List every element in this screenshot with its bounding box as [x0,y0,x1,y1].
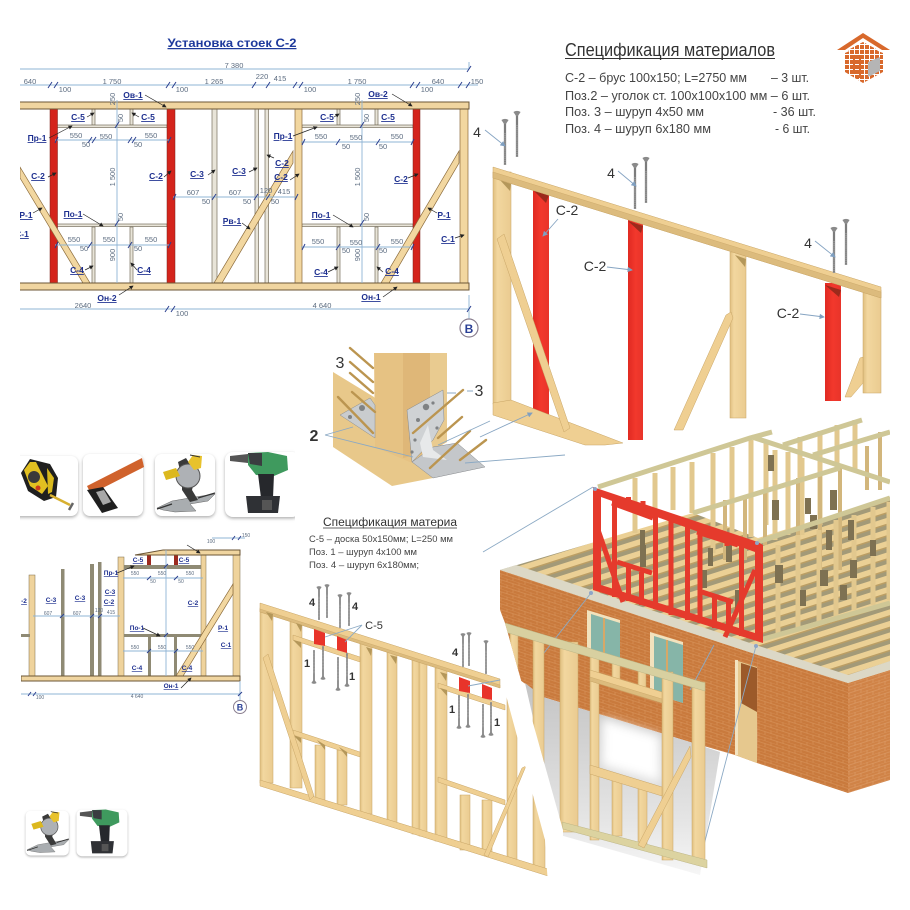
dimension numbers: 2640 [75,301,91,310]
detail leader lines [325,391,565,463]
element labels: Пр-1 [28,133,47,143]
element labels: По-1 [64,209,83,219]
element labels: С-4 [182,665,193,672]
dimension numbers: 50 [116,213,125,221]
dimension numbers: 1 500 [108,168,117,186]
callout numbers 4: 4 [473,124,481,140]
dimension numbers: 550 [131,571,139,577]
dimension numbers: 550 [186,645,194,651]
specification lines [309,534,453,571]
dimension numbers: 120 [95,608,103,614]
detail labels [310,355,484,445]
red stud 3 [825,283,841,401]
dimension numbers: 640 [432,77,444,86]
dimension numbers: 415 [278,187,290,196]
diagonal brace left [497,234,570,432]
brick wall center [757,655,848,793]
specification lines: С-5 – доска 50х150мм; L=250 мм [309,534,453,545]
dimension numbers: 550 [391,237,403,246]
dimension numbers: 50 [82,140,90,149]
element labels: С-5 [133,557,144,564]
element labels: Р-1 [437,210,451,220]
window headers and short studs [21,565,201,676]
brace shadows [266,612,447,757]
dimension numbers: 150 [471,77,483,86]
dimension numbers: 250 [108,93,117,105]
dimension numbers: 50 [379,142,387,151]
dimension ticks [48,66,471,312]
element labels: Он-1 [164,683,179,690]
callout numbers: 1 [304,658,310,670]
axis marker B: В [465,322,474,336]
floor bracket plate [412,443,485,478]
panel: specification for С-5 [309,517,458,571]
specification lines: Поз. 4 – шуруп 6х180мм; [309,560,419,571]
dimension numbers: 607 [187,188,199,197]
floor deck with joists [500,497,890,683]
side studs [295,108,468,283]
specification lines: - 6 шт. [775,122,810,136]
element labels: С-4 [137,265,151,275]
element labels: С-2 [188,600,199,607]
element labels: Ов-1 [123,90,143,100]
top plate [505,623,705,691]
callout numbers: 4 [309,597,316,609]
gray shadow backdrop [525,683,720,875]
dimension numbers: 50 [379,246,387,255]
top plate [260,603,500,688]
dimension lines [20,62,478,320]
dimension numbers: 550 [70,131,82,140]
callout numbers 4 [473,124,812,251]
element labels: С-3 [105,589,116,596]
dimension numbers: 250 [353,93,362,105]
red stud 1 [533,188,549,418]
element labels: С-1 [221,642,232,649]
element labels: С-5 [320,112,334,122]
dimension numbers: 1 265 [205,77,223,86]
dimension numbers: 607 [73,611,81,617]
dimension numbers: 550 [350,133,362,142]
thin gray studs [57,109,413,283]
studs [29,555,240,676]
icon: miter saw small [26,811,69,856]
dimension numbers: 50 [243,197,251,206]
dimension numbers: 50 [134,244,142,253]
brick wall left [500,570,758,763]
dimension numbers: 1 750 [103,77,121,86]
callout numbers: 1 [349,671,355,683]
dimension numbers: 4 640 [131,694,143,700]
dimension numbers: 50 [342,142,350,151]
element labels: С-1 [441,234,455,244]
dimension numbers: 550 [315,132,327,141]
bracket rib [420,425,447,460]
connector line to house frame [483,487,593,552]
element labels: С-3 [232,166,246,176]
brick wall right [848,670,890,793]
detail labels: 3 [336,355,345,372]
callout leader lines [480,130,835,437]
element labels: С-3 [75,595,86,602]
callout numbers: 4 [352,601,359,613]
element labels: Р-1 [218,625,228,632]
panel: material specification [565,40,816,136]
diagonal brace right [484,766,526,857]
projection lines [540,593,756,860]
dimension numbers: 550 [391,132,403,141]
red blocks С-5 [314,629,492,700]
left bracket plate [340,398,375,438]
dimension numbers: 550 [145,131,157,140]
top plate [493,167,881,298]
element labels: С-4 [314,267,328,277]
icon: carpenter square [83,454,144,516]
dimension numbers: 1 500 [353,168,362,186]
specification lines: Поз.2 – уголок ст. 100х100х100 мм – 6 шт. [565,89,810,103]
dimension numbers: 550 [312,237,324,246]
dimension numbers: 550 [158,571,166,577]
dimension numbers: 100 [207,539,215,545]
element labels [21,557,232,690]
post [374,353,447,463]
diagonal brace [176,584,233,676]
element labels: Ов-2 [368,89,388,99]
front frame [505,623,707,868]
element labels: Он-2 [97,293,117,303]
concrete ledge [500,565,890,683]
dimension numbers: 550 [131,645,139,651]
dimension numbers: 640 [24,77,36,86]
detail labels: 3 [475,383,484,400]
dimension numbers: 7 380 [225,61,243,70]
dimension numbers [36,533,250,701]
diagonal brace left [263,654,314,800]
leader arrows [33,94,464,297]
specification lines [565,71,816,136]
screws [311,584,494,738]
callout numbers [304,597,500,729]
specification lines: - 36 шт. [773,105,816,119]
element labels: С-5 [71,112,85,122]
full-height studs [260,608,545,870]
dimension numbers: 900 [108,249,117,261]
dimension numbers: 50 [362,114,371,122]
panel: corner bracket detail [310,348,565,486]
dimension numbers: 4 640 [313,301,331,310]
diagonal brace center [674,312,733,430]
short studs [612,661,647,844]
callout numbers: 1 [494,717,500,729]
top and bottom plates [21,550,240,681]
dimension numbers: 550 [145,235,157,244]
dimension numbers: 415 [274,74,286,83]
element labels: -2 [21,598,27,605]
element labels: С-1 [15,229,29,239]
specification lines: – 3 шт. [771,71,809,85]
dimension numbers: 50 [342,246,350,255]
dimension numbers: 550 [350,238,362,247]
red studs С-2 [50,109,420,283]
element labels: С-5 [141,112,155,122]
dimension numbers: 50 [150,579,156,585]
specification lines: Поз. 3 – шуруп 4х50 мм [565,105,704,119]
panel: house with highlighted frame [500,420,890,875]
element labels: С-2 [394,174,408,184]
element labels: С-3 [190,169,204,179]
dimension numbers: 50 [362,213,371,221]
dimension numbers: 550 [68,235,80,244]
dimension numbers: 50 [116,114,125,122]
element labels: С-4 [385,266,399,276]
diagonal brace right [845,357,863,397]
specification lines: Поз. 1 – шуруп 4х100 мм [309,547,417,558]
dimension numbers: 900 [353,249,362,261]
element labels: Пр-1 [104,570,119,577]
callout labels С-2: С-2 [584,258,606,274]
icon: miter saw [155,454,215,516]
bottom plate [562,822,707,868]
element labels: С-2 [104,599,115,606]
base board [333,372,433,486]
dimension numbers: 50 [271,197,279,206]
detail labels: 2 [310,428,319,445]
axis marker B [234,700,246,714]
element labels: Рв-1 [223,216,241,226]
callout numbers: 1 [449,704,455,716]
element labels: Он-1 [361,292,381,302]
element labels: С-4 [70,265,84,275]
panel: tools row [10,452,300,517]
dimension numbers: 550 [186,571,194,577]
dimension numbers: 50 [202,197,210,206]
panel: 3D wall frame with С-5 blocks [260,584,548,876]
element labels [15,89,455,303]
element labels: С-2 [149,171,163,181]
screws pos. 4 [501,111,850,273]
dimension numbers: 50 [80,244,88,253]
dimension numbers: 1 750 [348,77,366,86]
dimension lines [21,538,245,700]
element labels: С-2 [31,171,45,181]
dimension numbers: 100 [304,85,316,94]
bracket holes [348,401,439,454]
panel: second plan drawing [21,533,250,714]
windows [587,610,683,703]
middle and right studs [730,252,881,418]
red stud 2 [628,218,643,440]
dimension numbers: 50 [178,579,184,585]
dimension numbers: 550 [158,645,166,651]
bottom plate [260,780,548,876]
panel: top plan drawing [15,61,483,337]
specification lines: С-2 – брус 100х150; L=2750 мм [565,71,747,85]
element labels: Пр-1 [274,131,293,141]
red highlighted frame [593,487,763,643]
element labels: Р-1 [19,210,33,220]
element labels: По-1 [130,625,145,632]
dimension numbers [24,61,483,318]
callout labels С-2: С-2 [777,305,799,321]
icon: cordless drill [225,452,300,517]
callout numbers 4: 4 [804,235,812,251]
bottom plate [493,400,623,445]
element labels: С-5 [381,112,395,122]
headers and sills [590,670,662,796]
dimension numbers: 100 [176,85,188,94]
heading: Спецификация материа [323,517,458,529]
door [735,660,757,763]
element labels: С-4 [132,665,143,672]
specification heading: Спецификация материалов [565,40,775,60]
headers and sills [293,635,505,805]
dimension numbers: 100 [176,309,188,318]
stud top shadows [533,190,841,297]
leader arrows [117,545,200,688]
callout С-5: С-5 [365,620,383,632]
panel: tools bottom [26,809,128,856]
dimension numbers: 100 [421,85,433,94]
screws pos. 3 [338,348,486,468]
dimension numbers: 550 [100,132,112,141]
dimension numbers: 415 [107,610,115,616]
front studs [510,628,705,860]
icon: brick house logo [837,33,890,83]
title: Установка стоек С-2: Установка стоек С-2 [168,36,297,50]
diagonal brace [638,746,691,848]
red blocks С-5 [147,555,178,565]
top and bottom plates [18,102,469,290]
panel: 3D wall frame with red studs [473,111,881,445]
frame corner markers [589,487,759,648]
callout numbers 4: 4 [607,165,615,181]
specification lines: Поз. 4 – шуруп 6х180 мм [565,122,711,136]
back wall top plates and studs [598,420,890,640]
dimension numbers: 50 [134,140,142,149]
callout labels С-2 [556,202,799,321]
left stud [493,172,511,404]
dimension numbers: 100 [36,695,44,701]
dimension numbers: 100 [59,85,71,94]
callout numbers: 4 [452,647,459,659]
icon: cordless drill small [76,809,128,856]
dimension numbers: 607 [44,611,52,617]
callout labels С-2: С-2 [556,202,578,218]
white window opening [602,718,660,782]
right vertical bracket plate [407,390,444,462]
element labels: По-1 [312,210,331,220]
dimension numbers: 550 [103,235,115,244]
short studs [315,745,492,855]
element labels: С-2 [274,172,288,182]
dimension numbers: 120 [260,186,272,195]
dimension numbers: 220 [256,72,268,81]
diagonal braces [20,151,459,283]
dimension numbers: 150 [242,533,250,539]
axis marker B: В [237,702,244,712]
element labels: С-2 [275,158,289,168]
element labels: С-3 [46,597,57,604]
dimension ticks [28,536,242,696]
element labels: С-5 [179,557,190,564]
axis marker B [460,319,478,337]
icon: tape measure [10,456,78,516]
leader lines [325,625,500,686]
dimension numbers: 607 [229,188,241,197]
